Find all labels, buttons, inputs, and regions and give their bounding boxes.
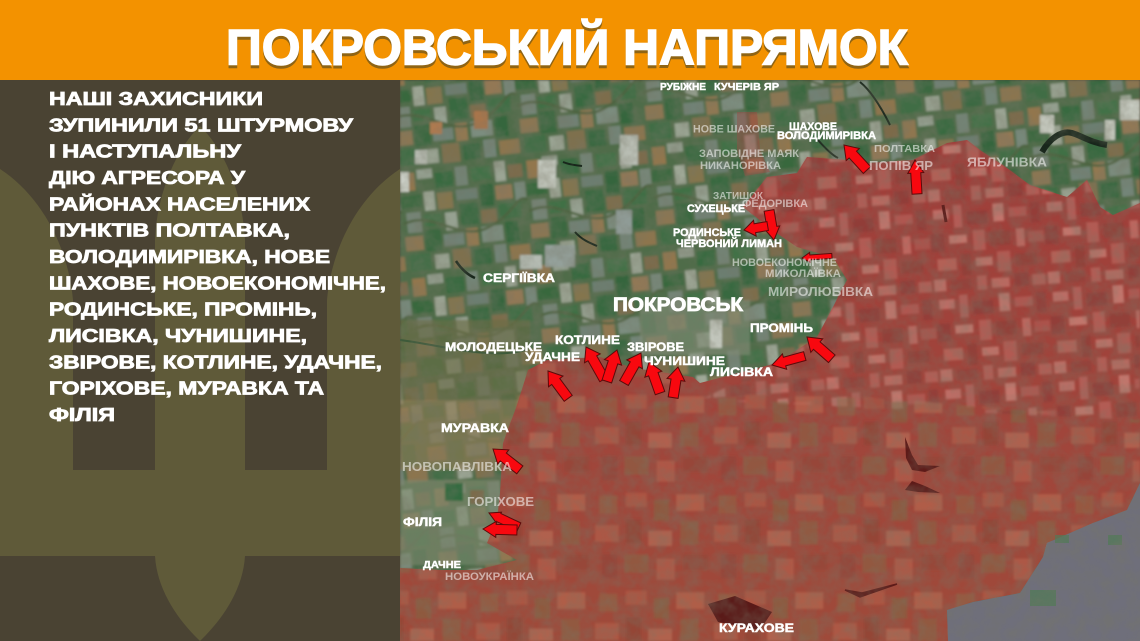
arrow: Rodynske [743,218,769,238]
body text: ЛИСІВКА, ЧУНИШИНЕ, [49,326,307,346]
arrow: Promin [801,330,838,366]
settlement labels: НОВОЕКОНОМІЧНЕ [732,257,837,269]
settlement labels: ПОЛТАВКА [874,143,935,155]
body text: ШАХОВЕ, НОВОЕКОНОМІЧНЕ, [49,273,386,293]
settlement labels: ЯБЛУНІВКА [967,154,1048,170]
settlement labels: ФІЛІЯ [403,515,442,529]
body text: ВОЛОДИМИРІВКА, НОВЕ [49,247,330,267]
settlement labels: ГОРІХОВЕ [467,495,534,509]
arrow: Kotlyne west [578,343,612,384]
title shadow: ПОКРОВСЬКИЙ НАПРЯМОК [226,22,908,78]
settlement labels: НОВОПАВЛІВКА [402,459,513,474]
texture overlay [400,80,1140,641]
arrow: Muravka [487,442,525,477]
body text [49,89,386,425]
settlement labels: ЧУНИШИНЕ [644,354,725,368]
settlement labels: ЗВІРОВЕ [627,340,684,354]
settlement labels: ДАЧНЕ [423,559,461,571]
left panel [0,89,400,641]
body text: ФІЛІЯ [49,405,115,425]
body text: ЗУПИНИЛИ 51 ШТУРМОВУ [49,115,354,135]
body text: І НАСТУПАЛЬНУ [49,142,242,162]
settlement labels [402,81,1048,635]
settlement labels: УДАЧНЕ [525,350,580,364]
arrow: Lysivka [770,348,807,373]
occupied territory (red overlay) [400,112,1140,641]
arrow: Kotlyne east [598,347,626,384]
body text: РАЙОНАХ НАСЕЛЕНИХ [49,193,310,214]
arrow: Horikhove south [483,521,517,538]
settlement labels: ЗАПОВІДНЕ МАЯК [699,148,799,160]
settlement labels: ПОКРОВСЬК [613,295,743,316]
arrow: Chunyshyne east [664,366,687,399]
settlement labels: НИКАНОРІВКА [700,160,781,172]
settlement labels: СУХЕЦЬКЕ [687,203,745,215]
settlement labels: РОДИНСЬКЕ [673,227,741,239]
arrow: Chunyshyne west [641,359,668,396]
settlement labels: МУРАВКА [441,421,509,435]
title: ПОКРОВСЬКИЙ НАПРЯМОК [226,18,908,76]
arrow: Fedorivka south [761,209,782,241]
dark water bodies in occupied area [708,205,946,630]
arrow: Horikhove north [486,508,521,532]
body text: НАШІ ЗАХИСНИКИ [49,89,263,109]
settlement labels: ЛИСІВКА [710,365,773,379]
body text: ДІЮ АГРЕСОРА У [49,168,246,188]
map panel [400,80,1140,641]
urban area: Kurakhove side [947,483,1140,641]
settlement labels: ШАХОВЕ [789,121,837,133]
trident emblem [0,126,400,641]
arrows [483,139,925,538]
settlement labels: ФЕДОРІВКА [742,198,808,210]
body text: ПУНКТІВ ПОЛТАВКА, [49,221,290,241]
settlement labels: НОВОУКРАЇНКА [445,570,534,583]
settlement labels: ПРОМІНЬ [750,321,813,335]
settlement labels: КОТЛИНЕ [555,333,620,347]
settlement labels: МИРОЛЮБІВКА [768,284,874,299]
body text: ГОРІХОВЕ, МУРАВКА ТА [49,379,324,399]
settlement labels: СЕРГІЇВКА [483,270,555,285]
settlement labels: КУРАХОВЕ [719,621,794,635]
green farmland background [400,80,1140,641]
arrow: Zvirove [616,349,649,387]
settlement labels: РУБІЖНЕ [660,82,706,93]
rivers and reservoirs [400,82,1107,353]
settlement labels: ПОПІВ ЯР [869,158,933,173]
settlement labels: КУЧЕРІВ ЯР [714,81,779,93]
settlement labels: ЧЕРВОНИЙ ЛИМАН [676,237,782,250]
arrow: Popiv Yar [907,160,925,194]
settlement labels: МИКОЛАЇВКА [765,267,841,280]
settlement labels: ВОЛОДИМИРІВКА [777,130,876,142]
settlement labels: ЗАТИШОК [713,191,764,202]
arrow: Novoekonomichne [802,251,832,263]
body text: РОДИНСЬКЕ, ПРОМІНЬ, [49,300,317,320]
arrow: Volodymyrivka [837,139,874,176]
body text: ЗВІРОВЕ, КОТЛИНЕ, УДАЧНЕ, [49,352,382,372]
settlement labels: МОЛОДЕЦЬКЕ [445,340,542,354]
arrow: Udachne [541,366,575,404]
green patches in urban area [1030,535,1122,606]
settlement labels: НОВЕ ШАХОВЕ [693,124,775,136]
title bar [0,0,1140,80]
